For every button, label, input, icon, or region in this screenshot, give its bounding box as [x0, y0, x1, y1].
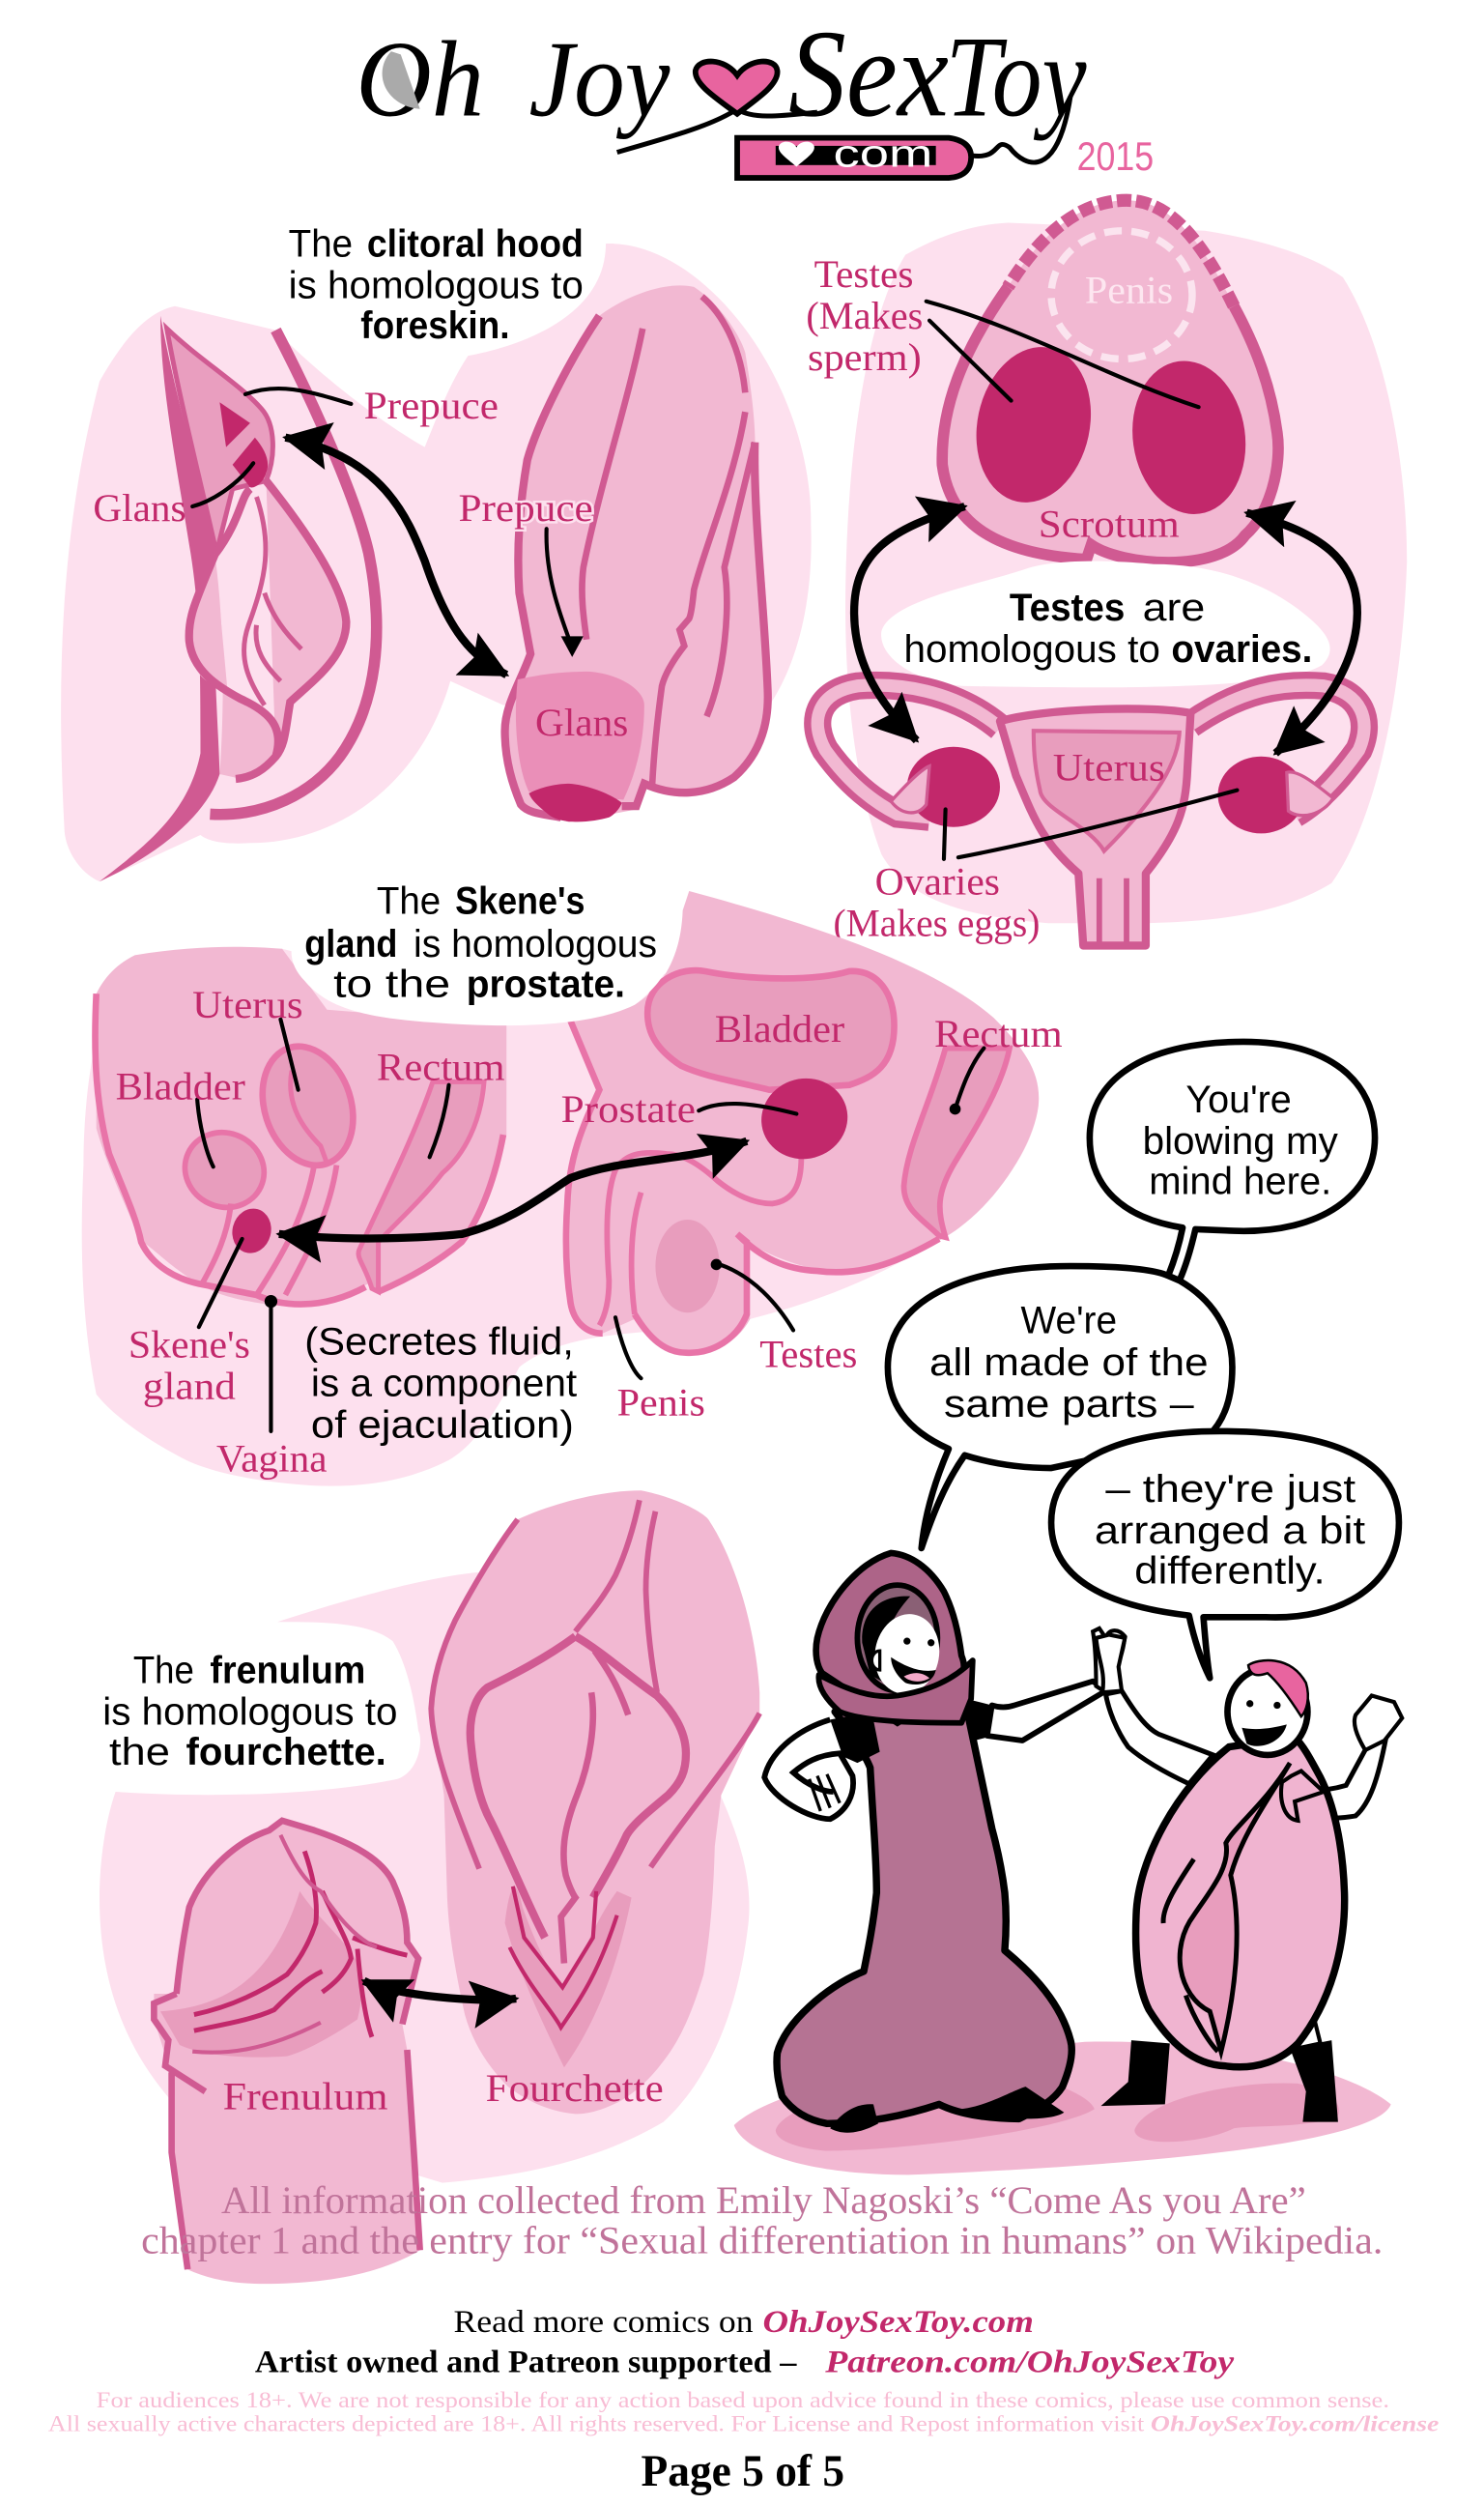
costume folds: [1180, 1763, 1290, 2052]
left arm: [764, 1719, 853, 1819]
labels: sperm): [808, 336, 922, 379]
speech bubble: blowing my mind: [1090, 1042, 1375, 1281]
double arrow right: [1246, 513, 1357, 753]
labels: Glans: [93, 487, 186, 530]
left body cross-section: [95, 947, 506, 1307]
labels: [116, 984, 1063, 1480]
logo .com pill: [737, 97, 1070, 178]
panel: Skene's gland and prostate: [82, 877, 1063, 1486]
labels: Penis: [1085, 269, 1173, 311]
labels: gland: [143, 1366, 236, 1408]
speech bubble: arranged differently: – they're just: [1105, 1468, 1356, 1511]
callout bubble: [292, 877, 680, 1025]
speech bubble: same parts: [888, 1266, 1232, 1548]
footer links: OhJoySexToy.com: [763, 2304, 1034, 2340]
right arm: [1295, 1738, 1386, 1818]
callout text: are: [1143, 587, 1205, 629]
left arm: [1105, 1691, 1213, 1784]
labels: Bladder: [116, 1066, 245, 1109]
hood: [816, 1553, 964, 1723]
raised hand: [1093, 1628, 1125, 1692]
scrotum diagram: [937, 200, 1282, 565]
speech bubble: same parts: We're: [1021, 1300, 1117, 1342]
callout text: Testes: [1010, 587, 1125, 629]
labels: (Makes: [806, 295, 923, 337]
uterus diagram: [817, 685, 1364, 945]
right anatomy diagram: [503, 285, 769, 822]
callout text: Skene's: [455, 879, 585, 922]
leader lines: [192, 389, 572, 648]
lower anatomy diagram: [154, 1821, 420, 2284]
speech bubble: arranged differently: [1051, 1431, 1399, 1678]
callout text: The: [289, 222, 353, 265]
logo wordmark: [356, 4, 1087, 142]
credit text: All information collected from Emily Nagoski’s “Come As you Are”: [221, 2179, 1306, 2222]
face: [869, 1609, 946, 1699]
labels: Prepuce: [458, 487, 593, 530]
callout text: [102, 1649, 397, 1773]
callout text: [289, 222, 584, 347]
fluid note: of ejaculation): [311, 1404, 574, 1447]
labels: Scrotum: [1039, 504, 1180, 546]
boots and leg: [1285, 1992, 1321, 2048]
panel: frenulum and fourchette: [100, 1490, 759, 2284]
callout text: fourchette.: [186, 1731, 386, 1773]
callout text: The: [377, 879, 441, 922]
callout text: [304, 879, 657, 1005]
callout text: homologous to: [903, 628, 1160, 671]
labels: Uterus: [1053, 747, 1165, 790]
logo heart: [696, 62, 778, 114]
collar: [818, 1660, 973, 1723]
callout text: the: [109, 1731, 170, 1773]
credit text: [141, 2179, 1383, 2262]
character: left figure in mauve costume: [764, 1553, 1125, 2133]
labels: Testes: [814, 253, 913, 296]
double arrow left: [854, 506, 965, 740]
speech bubble: blowing my mind: blowing my: [1143, 1120, 1338, 1163]
labels: Prostate: [561, 1088, 696, 1131]
double arrow: [279, 1141, 747, 1238]
panel background: [61, 244, 812, 881]
labels: [93, 385, 628, 744]
leader lines: [197, 1020, 984, 1431]
speech bubble: blowing my mind: You're: [1185, 1079, 1292, 1121]
labels: (Makes eggs): [834, 902, 1040, 944]
raised hand: [1096, 1635, 1125, 1692]
callout text: The: [133, 1649, 194, 1691]
left anatomy diagram: [100, 316, 377, 881]
costume body: [1136, 1738, 1345, 2067]
speech bubble: arranged differently: arranged a bit: [1095, 1510, 1365, 1552]
speech bubble: same parts: same parts –: [944, 1383, 1195, 1425]
logo .com pill: com: [834, 132, 932, 175]
logo wordmark: Oh: [356, 19, 484, 139]
labels: Rectum: [377, 1047, 505, 1089]
labels: Prepuce: [364, 385, 499, 427]
speech bubble: arranged differently: differently.: [1134, 1549, 1326, 1592]
labels: Testes: [759, 1334, 857, 1376]
labels: Penis: [617, 1381, 705, 1424]
sleeve: [1281, 1771, 1324, 1821]
callout text: [903, 587, 1312, 671]
logo year: 2015: [1077, 133, 1154, 179]
panel background: [845, 223, 1407, 923]
callout text: gland: [304, 923, 397, 965]
character: right figure in pink costume: [1096, 1635, 1402, 2122]
callout text: clitoral hood: [367, 222, 584, 265]
leader lines: [927, 302, 1237, 859]
logo: [356, 4, 1154, 179]
disclaimer: [48, 2388, 1439, 2437]
callout text: is homologous to: [102, 1690, 397, 1733]
disclaimer: OhJoySexToy.com/license: [1151, 2412, 1439, 2437]
double arrow: [285, 438, 506, 675]
speech bubble: same parts: all made of the: [929, 1341, 1209, 1384]
ground shadow: [734, 2041, 1391, 2174]
right body cross-section: [564, 891, 1039, 1353]
labels: Glans: [535, 702, 628, 744]
fluid note: [304, 1320, 577, 1447]
page number: Page 5 of 5: [642, 2447, 844, 2496]
callout text: to the: [333, 963, 450, 1005]
credit text: chapter 1 and the entry for “Sexual differentiation in humans” on Wikipedia.: [141, 2220, 1383, 2262]
double arrow: [364, 1981, 516, 2000]
disclaimer: All sexually active characters depicted are 18+. All rights reserved. For License and Repost information visit: [48, 2412, 1145, 2437]
labels: [223, 2067, 664, 2117]
upper anatomy diagram: [431, 1490, 759, 2114]
footer links: Patreon.com/OhJoySexToy: [824, 2344, 1234, 2379]
labels: Uterus: [192, 984, 303, 1026]
fluid note: (Secretes fluid,: [304, 1320, 574, 1363]
labels: Rectum: [934, 1013, 1063, 1055]
labels: Frenulum: [223, 2075, 388, 2117]
waving hand: [1355, 1696, 1402, 1750]
panel: clitoral hood and foreskin: [61, 222, 812, 881]
callout text: frenulum: [210, 1649, 365, 1691]
labels: Fourchette: [486, 2067, 664, 2110]
callout bubble: [881, 561, 1330, 687]
costume body: [777, 1707, 1071, 2123]
panel background: [100, 1572, 750, 2183]
logo wordmark: Toy: [946, 13, 1087, 140]
sleeves: [830, 1699, 992, 1763]
callout text: foreskin.: [360, 304, 510, 347]
logo wordmark: Joy: [528, 19, 671, 139]
labels: Ovaries: [875, 860, 1000, 903]
disclaimer: For audiences 18+. We are not responsible for any action based upon advice found in these comics, please use common sense.: [97, 2388, 1389, 2413]
labels: Vagina: [216, 1437, 328, 1480]
callout text: is homologous: [414, 923, 657, 965]
logo wordmark: Sex: [788, 4, 949, 142]
labels: Skene's: [128, 1324, 250, 1367]
labels: [806, 253, 1180, 944]
right arm: [987, 1682, 1105, 1741]
speech bubble: blowing my mind: mind here.: [1149, 1160, 1331, 1202]
fluid note: is a component: [311, 1362, 577, 1404]
head: [1227, 1668, 1307, 1755]
footer links: Read more comics on: [453, 2304, 754, 2340]
callout text: is homologous to: [289, 264, 584, 306]
labels: Bladder: [715, 1008, 844, 1051]
shoes: [830, 2087, 1064, 2133]
callout text: ovaries.: [1171, 628, 1312, 671]
footer links: [255, 2304, 1234, 2379]
panel: testes and ovaries: [806, 200, 1407, 945]
footer links: Artist owned and Patreon supported –: [255, 2344, 797, 2379]
callout text: prostate.: [467, 963, 625, 1005]
panel background: [82, 949, 1039, 1486]
